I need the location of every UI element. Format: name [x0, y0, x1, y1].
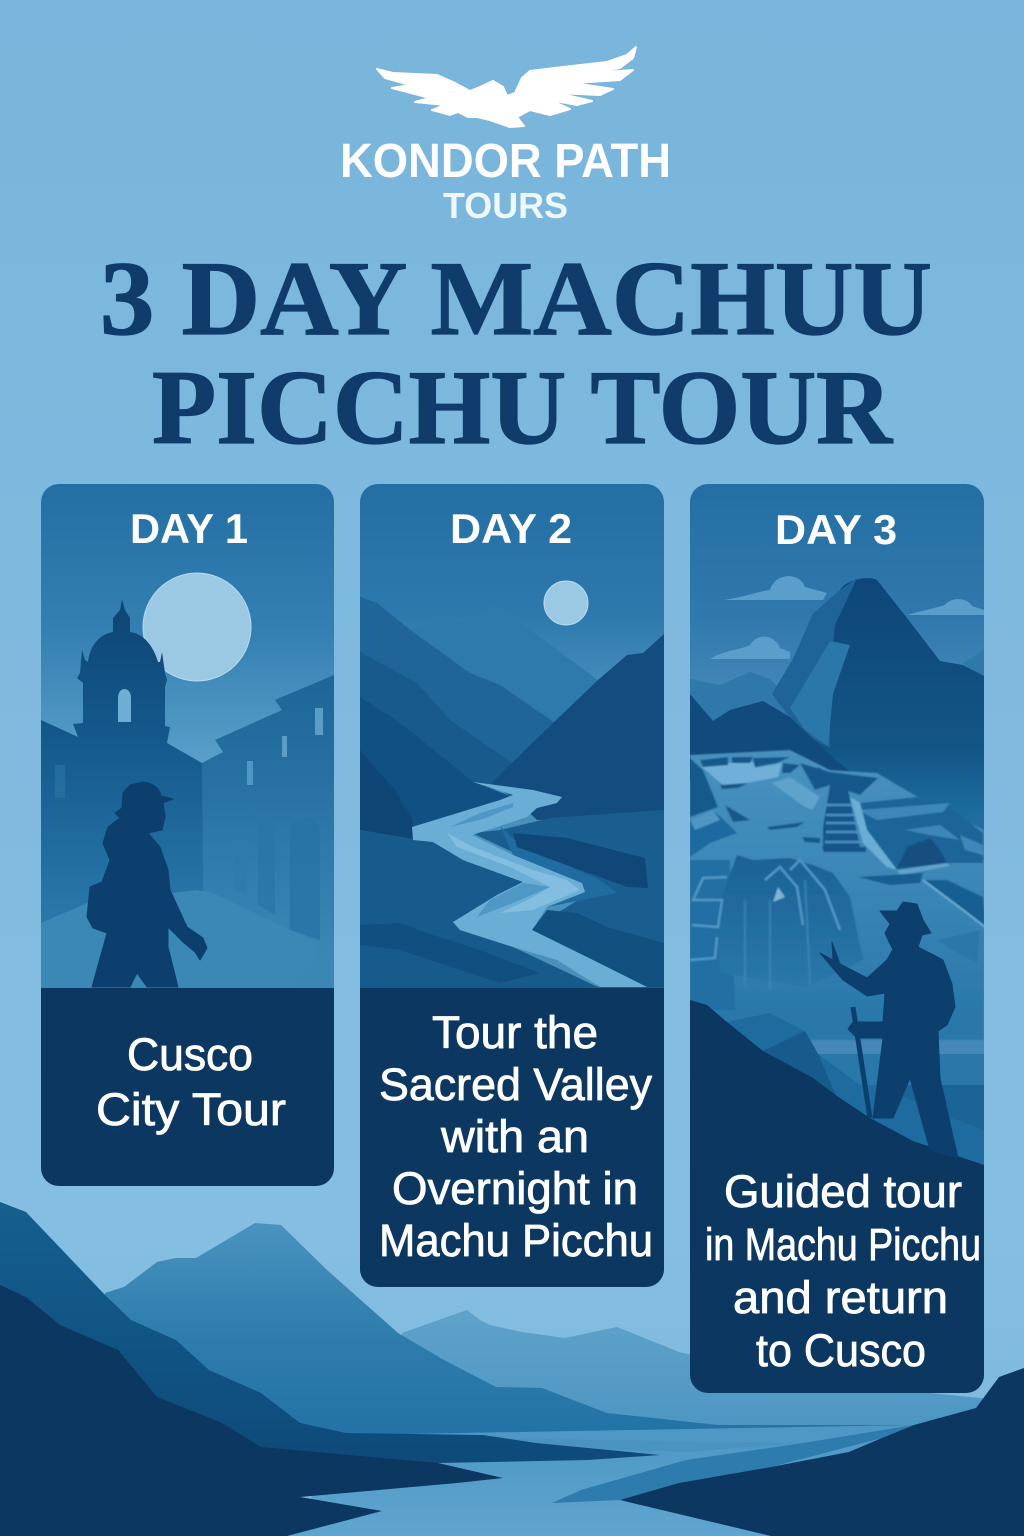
- lower right trees: [532, 910, 664, 987]
- panel: day 1: [41, 484, 334, 1186]
- foreground hills: [727, 1013, 984, 1180]
- brand subtitle: TOURS: [443, 185, 568, 226]
- logo: condor and brand name: [340, 47, 671, 226]
- landscape: bottom mountains and river: [0, 1202, 1024, 1536]
- trekking pole: [853, 1007, 870, 1118]
- day 1 description: [96, 1029, 286, 1135]
- day 2 description: with an: [440, 1111, 589, 1162]
- lower left field: [360, 830, 600, 988]
- day 3 description: Guided tour: [724, 1166, 962, 1217]
- river: [412, 782, 647, 987]
- label bar: [41, 988, 334, 1186]
- panel: day 2: [360, 484, 664, 1287]
- arches: [290, 876, 320, 940]
- church silhouette: [41, 600, 203, 923]
- day 3 description: to Cusco: [756, 1325, 926, 1376]
- day 2 description: Machu Picchu: [379, 1215, 653, 1266]
- mid ridge: [690, 694, 860, 780]
- hiker silhouette: [820, 902, 958, 1158]
- right building: [202, 675, 334, 988]
- hiker silhouette: [87, 782, 207, 987]
- icon: moon: [544, 581, 588, 625]
- left mountains: [360, 597, 555, 780]
- day 3 heading: DAY 3: [775, 506, 897, 553]
- mountain: [772, 578, 984, 860]
- day 1 description: Cusco: [127, 1029, 253, 1080]
- day 2 description: Overnight in: [392, 1163, 638, 1214]
- day 2 description: Sacred Valley: [379, 1059, 652, 1110]
- brand name: KONDOR PATH: [340, 135, 671, 188]
- ruins gables: [727, 855, 862, 970]
- train band: [513, 833, 648, 888]
- channel: [500, 826, 617, 907]
- day 2 heading: DAY 2: [450, 505, 572, 552]
- mountain face: [772, 578, 857, 748]
- icon: condor: [377, 47, 636, 127]
- windows: [118, 689, 131, 722]
- ruins base: [690, 750, 984, 1040]
- title: 3 DAY MACHUU: [100, 240, 932, 357]
- lower left trees: [360, 923, 540, 983]
- panel: day 3: [690, 484, 985, 1400]
- day 1 heading: DAY 1: [130, 505, 248, 552]
- title: [100, 240, 932, 466]
- label bar: [360, 988, 664, 1287]
- back hills: [690, 650, 984, 721]
- right field: [472, 810, 664, 988]
- day 1 description: City Tour: [96, 1084, 286, 1135]
- day 2 description: [379, 1007, 653, 1266]
- day 2 description: Tour the: [432, 1007, 598, 1058]
- right mountain: [490, 634, 664, 820]
- ruins: [690, 750, 985, 1040]
- back mountain: [430, 644, 598, 790]
- road: [41, 890, 226, 988]
- day 3 description: and return: [733, 1272, 948, 1323]
- title: PICCHU TOUR: [152, 349, 893, 466]
- clouds: [710, 576, 984, 659]
- day 3 description: [705, 1166, 981, 1376]
- icon: moon: [143, 573, 251, 681]
